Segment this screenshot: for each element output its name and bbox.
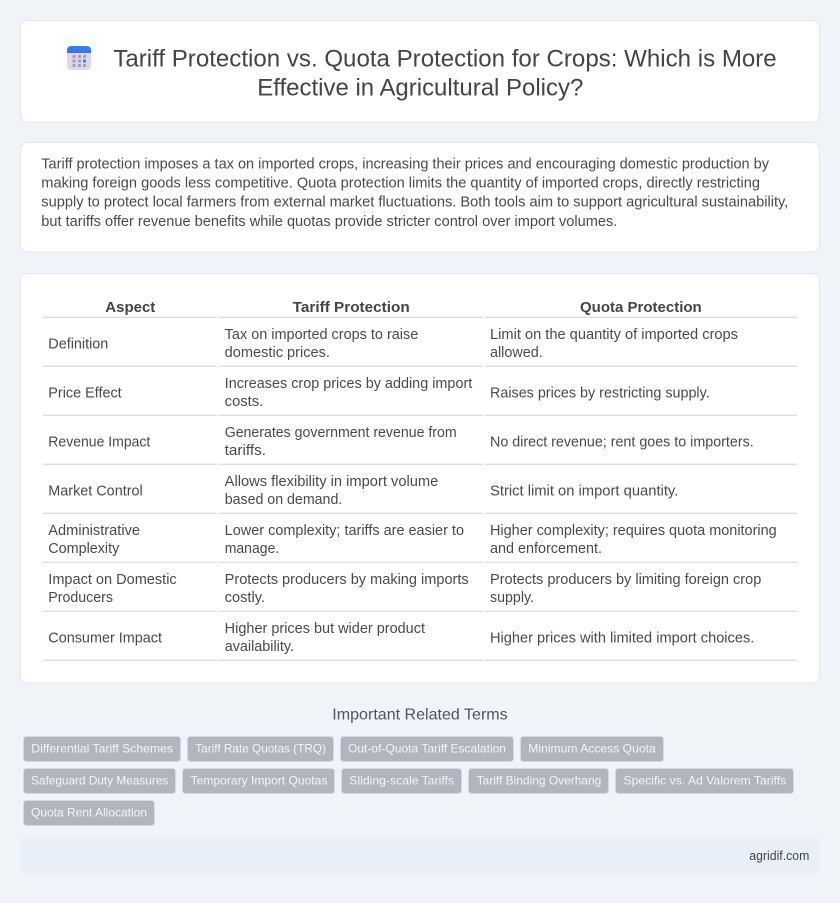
- table row: impact on domestic producers: Producers: [48, 590, 113, 606]
- table row: revenue impact: Revenue Impact: [48, 434, 150, 450]
- tag: safeguard duty measures: Safeguard Duty Measures: [31, 774, 168, 788]
- tag: temporary import quotas: Temporary Import Quotas: [191, 774, 327, 788]
- tag: sliding-scale tariffs: Sliding-scale Tariffs: [349, 774, 454, 788]
- table row: impact on domestic producers: [43, 572, 797, 612]
- table header row: Aspect: [105, 300, 156, 316]
- table row: administrative complexity: and enforcement.: [490, 541, 602, 557]
- heading: important related terms: Important Related Terms: [332, 706, 508, 723]
- table row: revenue impact: tariffs.: [225, 443, 266, 459]
- title: Tariff Protection vs. Quota Protection for Crops: Which is More: [113, 46, 777, 73]
- table row: market control: [43, 474, 797, 514]
- table row: revenue impact: Generates government revenue from: [225, 425, 457, 441]
- table row: administrative complexity: Complexity: [48, 541, 120, 557]
- footer: [20, 839, 820, 873]
- table row: administrative complexity: Lower complexity; tariffs are easier to: [225, 523, 464, 539]
- table row: consumer impact: Higher prices but wider product: [225, 621, 425, 637]
- table row: market control: Strict limit on import quantity.: [490, 483, 678, 499]
- title: [113, 46, 777, 102]
- tag: out-of-quota tariff escalation: [340, 736, 514, 762]
- table row: market control: Allows flexibility in import volume: [225, 474, 438, 490]
- tag: tariff binding overhang: Tariff Binding Overhang: [477, 774, 601, 788]
- table row: impact on domestic producers: Impact on Domestic: [48, 572, 177, 588]
- title: Effective in Agricultural Policy?: [257, 75, 583, 102]
- tag: quota rent allocation: [24, 800, 154, 826]
- table row: definition: allowed.: [490, 345, 543, 361]
- tag: specific vs. ad valorem tariffs: [616, 768, 794, 794]
- tag: minimum access quota: [520, 736, 664, 762]
- text block: introduction paragraph: making foreign goods less competitive. Quota protection limits the quantity of imported crops, directly restricting: [41, 175, 760, 191]
- panel: title header: [20, 20, 820, 122]
- text block: introduction paragraph: but tariffs offer revenue benefits while quotas provide stricter control over import volumes.: [41, 214, 617, 230]
- table row: administrative complexity: Higher complexity; requires quota monitoring: [490, 523, 777, 539]
- tag: differential tariff schemes: [24, 736, 180, 762]
- panel: related term tags: [24, 736, 794, 826]
- table row: definition: Tax on imported crops to raise: [225, 327, 418, 343]
- panel: introduction: [20, 142, 820, 252]
- icon: calendar: [67, 46, 91, 70]
- tag: quota rent allocation: Quota Rent Allocation: [31, 806, 147, 820]
- table row: consumer impact: Consumer Impact: [48, 630, 162, 646]
- text block: introduction paragraph: supply to protect local farmers from external market fluctuations. Both tools aim to support agricultural sustainability,: [41, 195, 788, 211]
- table row: consumer impact: Higher prices with limited import choices.: [490, 630, 754, 646]
- table row: administrative complexity: manage.: [225, 541, 279, 557]
- tag: out-of-quota tariff escalation: Out-of-Quota Tariff Escalation: [348, 742, 506, 756]
- table row: impact on domestic producers: costly.: [225, 590, 265, 606]
- tag: sliding-scale tariffs: [342, 768, 462, 794]
- table row: definition: [43, 327, 797, 367]
- table row: price effect: Raises prices by restricting supply.: [490, 385, 710, 401]
- table header row: Tariff Protection: [293, 300, 410, 316]
- table row: impact on domestic producers: supply.: [490, 590, 534, 606]
- table row: administrative complexity: [43, 523, 797, 563]
- table row: consumer impact: availability.: [225, 639, 294, 655]
- table row: market control: Market Control: [48, 483, 143, 499]
- table row: definition: domestic prices.: [225, 345, 330, 361]
- footer: agridif.com: [749, 849, 809, 863]
- table row: consumer impact: [43, 621, 797, 661]
- text block: introduction paragraph: Tariff protection imposes a tax on imported crops, increasing their prices and encouraging domestic production by: [41, 156, 770, 172]
- table row: definition: Definition: [48, 336, 108, 352]
- tag: temporary import quotas: [182, 768, 334, 794]
- tag: tariff binding overhang: [468, 768, 608, 794]
- panel: comparison table: [20, 274, 820, 683]
- tag: differential tariff schemes: Differential Tariff Schemes: [31, 742, 173, 756]
- tag: tariff rate quotas: [188, 736, 334, 762]
- tag: safeguard duty measures: [24, 768, 176, 794]
- table row: price effect: Increases crop prices by adding import: [225, 376, 472, 392]
- table row: revenue impact: No direct revenue; rent goes to importers.: [490, 434, 754, 450]
- table row: price effect: costs.: [225, 394, 263, 410]
- text block: introduction paragraph: [41, 156, 788, 230]
- tag: specific vs. ad valorem tariffs: Specific vs. Ad Valorem Tariffs: [624, 774, 786, 788]
- table row: definition: Limit on the quantity of imported crops: [490, 327, 738, 343]
- table row: administrative complexity: Administrative: [48, 523, 140, 539]
- table row: market control: based on demand.: [225, 492, 342, 508]
- tag: tariff rate quotas: Tariff Rate Quotas (TRQ): [195, 742, 326, 756]
- table header row: [43, 300, 797, 318]
- table row: impact on domestic producers: Protects producers by limiting foreign crop: [490, 572, 761, 588]
- table row: impact on domestic producers: Protects producers by making imports: [225, 572, 469, 588]
- table row: revenue impact: [43, 425, 797, 465]
- table row: price effect: [43, 376, 797, 416]
- tag: minimum access quota: Minimum Access Quota: [528, 742, 656, 756]
- table row: price effect: Price Effect: [48, 385, 122, 401]
- table header row: Quota Protection: [580, 300, 702, 316]
